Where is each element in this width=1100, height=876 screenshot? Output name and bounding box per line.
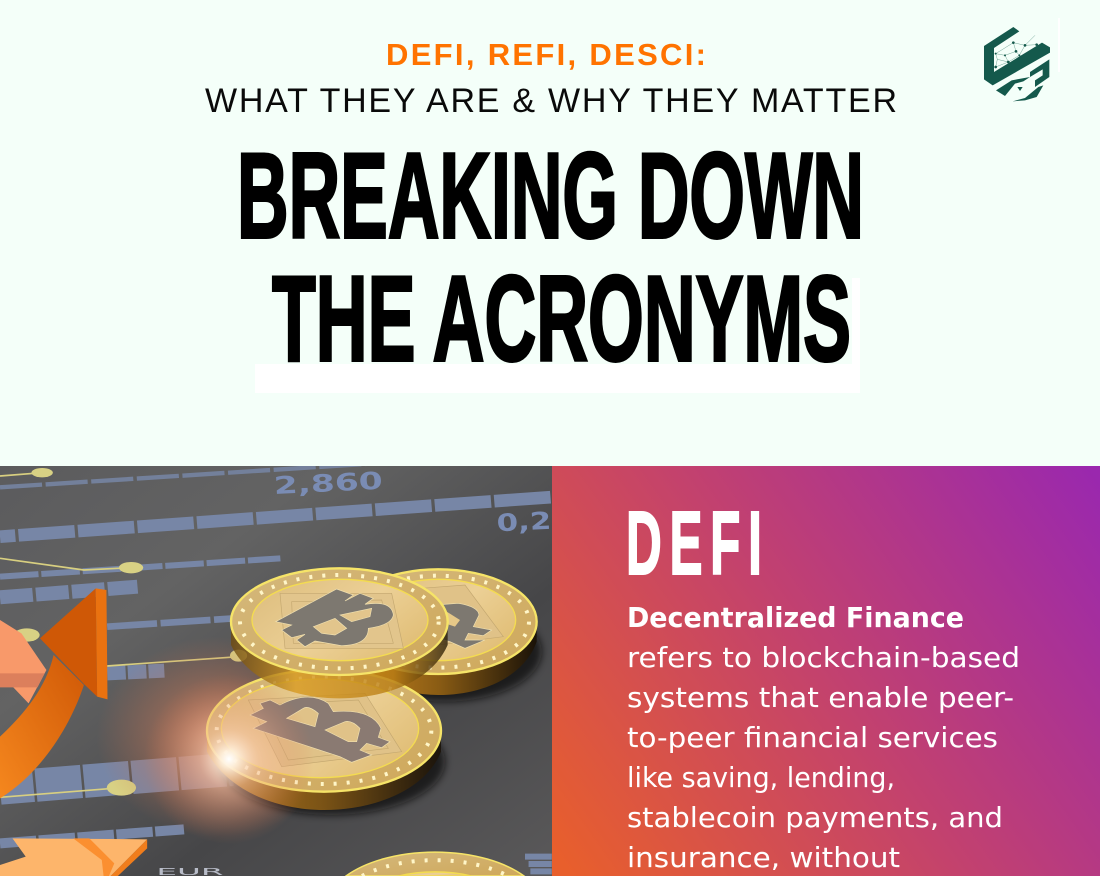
- DeFi description: to-peer financial services: [627, 721, 998, 754]
- DeFi description: Decentralized Finance: [627, 601, 964, 634]
- headline: [237, 128, 864, 386]
- orange arrow shapes: [0, 620, 46, 703]
- white sliver beside logo: [1058, 18, 1060, 72]
- panel: photo of bitcoin coins on a chart: 0,2: [496, 507, 552, 537]
- bitcoin symbol shape: [250, 697, 390, 762]
- coin: back right: [372, 568, 538, 695]
- DeFi description: refers to blockchain-based: [627, 641, 1020, 674]
- coin: front top: [231, 568, 448, 698]
- DeFi description: stablecoin payments, and: [627, 801, 1003, 834]
- warm glow on the table: [106, 645, 279, 828]
- DeFi description: insurance, without: [627, 841, 900, 874]
- DeFi description: systems that enable peer-: [627, 681, 1014, 714]
- coin group: [207, 568, 542, 815]
- lens flare: [152, 683, 304, 838]
- coin: lower centre: [207, 670, 441, 810]
- DeFi heading: DEFI: [626, 493, 770, 594]
- panel: photo of bitcoin coins on a chart: [0, 463, 557, 876]
- coin: bottom, cropped by frame: [346, 852, 524, 876]
- chart bars: [0, 463, 557, 871]
- DeFi description: [627, 601, 1020, 874]
- subtitle: WHAT THEY ARE & WHY THEY MATTER: [205, 82, 897, 120]
- coin shadows: [218, 630, 546, 819]
- eyebrow: topic list: DEFI, REFI, DESCI:: [386, 37, 706, 72]
- panel: DeFi definition: [552, 466, 1100, 876]
- DeFi description: like saving, lending,: [627, 761, 895, 794]
- chart numbers: 2,860: [273, 467, 383, 500]
- logo icon: [984, 27, 1050, 101]
- bitcoin symbol shape: [276, 589, 393, 647]
- white highlight behind headline: [255, 278, 860, 393]
- chart lines and markers: [0, 473, 239, 797]
